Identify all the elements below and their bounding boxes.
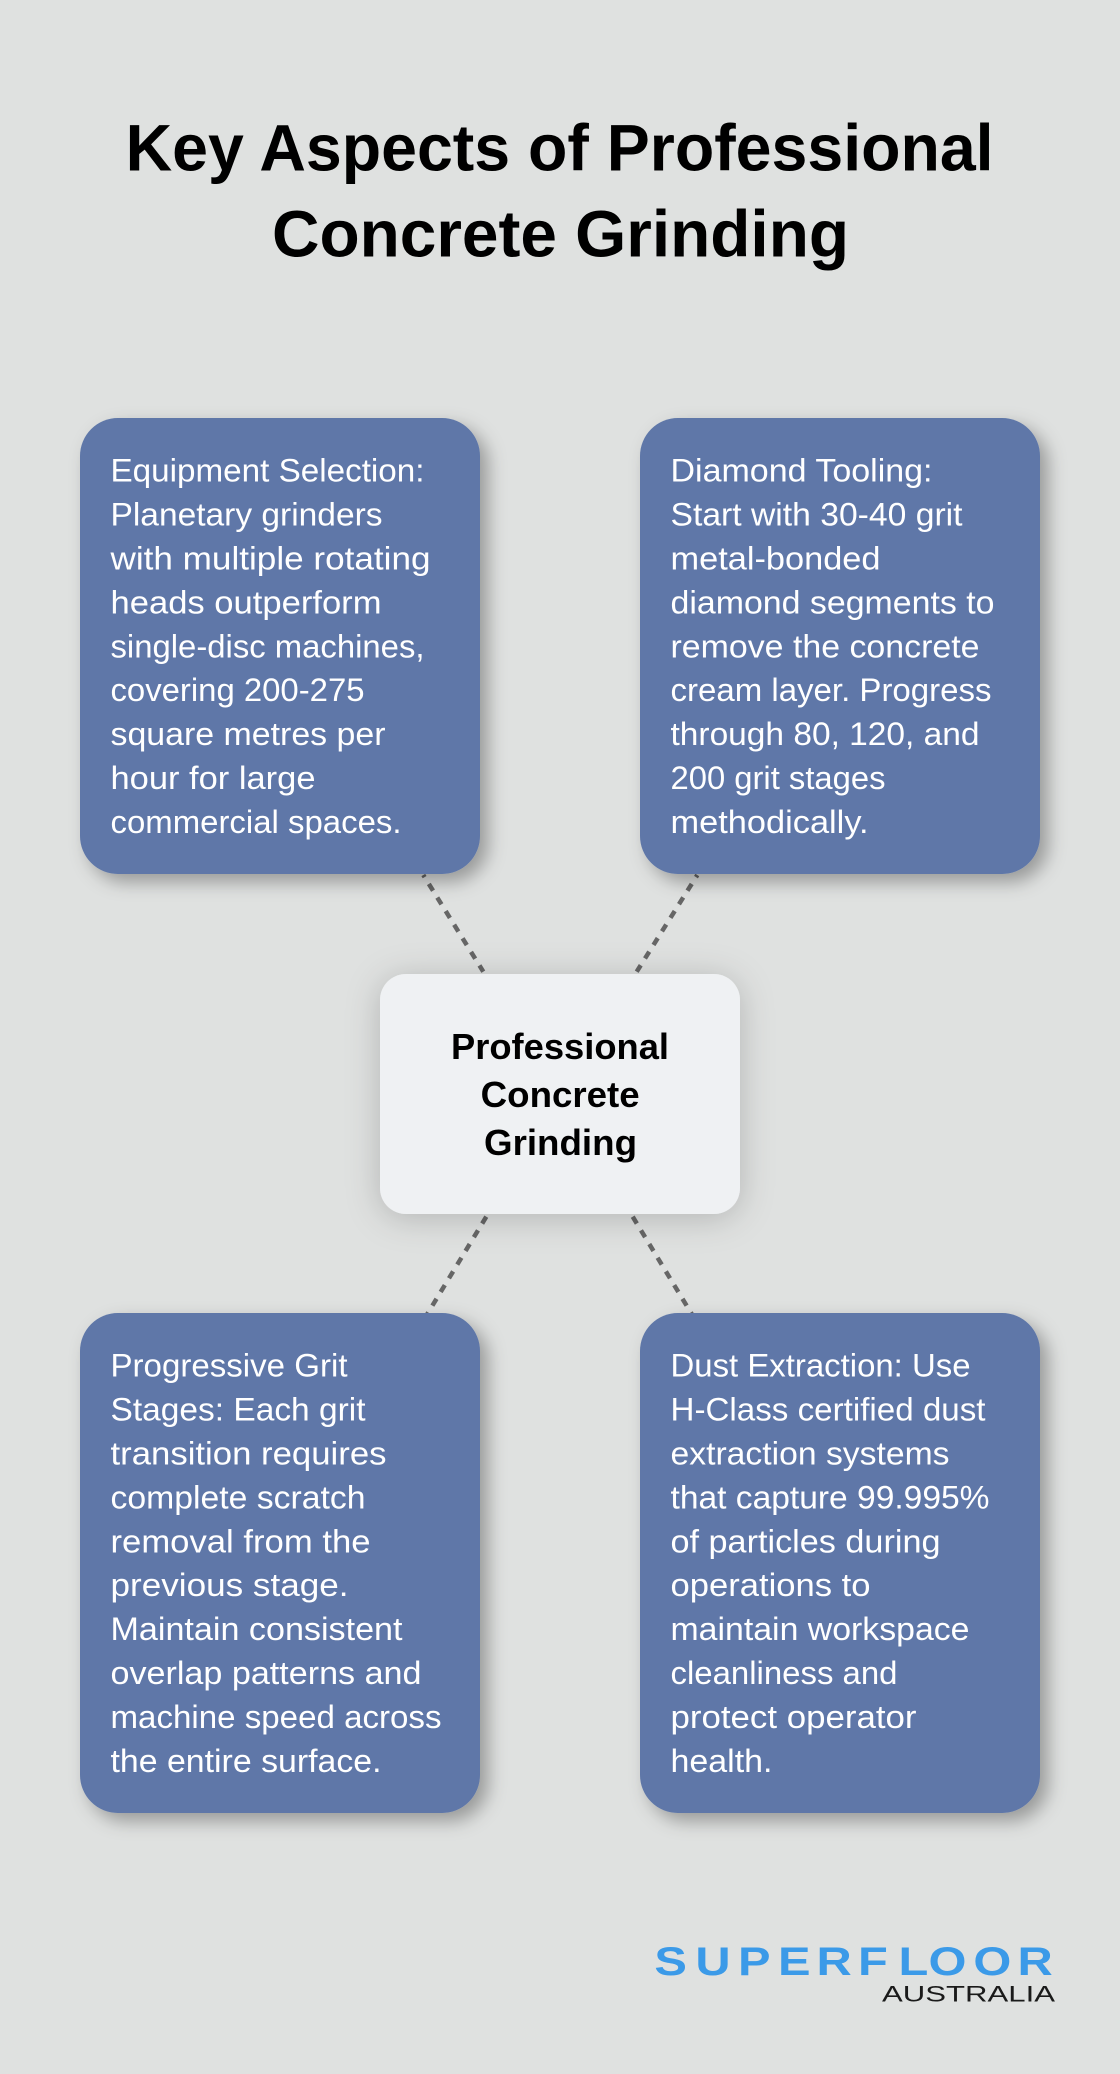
title bbox=[126, 110, 994, 270]
panel: equipment selection: hour for large bbox=[110, 760, 316, 796]
panel: diamond tooling: Start with 30-40 grit bbox=[670, 497, 963, 533]
title: Key Aspects of Professional bbox=[126, 110, 994, 184]
panel: equipment selection: single-disc machines, bbox=[110, 628, 424, 664]
panel: dust extraction: cleanliness and bbox=[670, 1655, 898, 1691]
panel: dust extraction: protect operator bbox=[670, 1699, 917, 1735]
panel: equipment selection: with multiple rotating bbox=[109, 540, 430, 576]
panel: equipment selection: heads outperform bbox=[110, 584, 382, 620]
panel: dust extraction: extraction systems bbox=[670, 1436, 950, 1472]
title: Concrete Grinding bbox=[272, 196, 849, 270]
panel: progressive grit stages: Stages: Each grit bbox=[110, 1392, 366, 1428]
panel: diamond tooling: methodically. bbox=[670, 804, 868, 840]
panel: diamond tooling: Diamond Tooling: bbox=[670, 453, 932, 489]
panel: diamond tooling: 200 grit stages bbox=[670, 760, 886, 796]
panel: equipment selection: commercial spaces. bbox=[110, 804, 402, 840]
panel: dust extraction bbox=[640, 1313, 1040, 1813]
logo: Superfloor Australia bbox=[654, 1940, 1056, 2007]
panel: dust extraction: health. bbox=[670, 1743, 772, 1779]
connector: diamond tooling to centre bbox=[637, 875, 697, 972]
panel: progressive grit stages: machine speed across bbox=[110, 1699, 441, 1735]
panel: diamond tooling: metal-bonded bbox=[670, 540, 880, 576]
panel: centre topic bbox=[380, 974, 740, 1214]
panel: progressive grit stages: overlap patterns and bbox=[110, 1655, 422, 1691]
panel: equipment selection: Equipment Selection: bbox=[110, 453, 424, 489]
logo: Superfloor Australia: SUPERFLOOR bbox=[654, 1940, 1053, 1984]
panel: equipment selection: square metres per bbox=[110, 716, 386, 752]
panel: diamond tooling: through 80, 120, and bbox=[670, 716, 980, 752]
panel: progressive grit stages bbox=[80, 1313, 480, 1813]
panel: equipment selection: Planetary grinders bbox=[110, 497, 382, 533]
panel: progressive grit stages: previous stage. bbox=[110, 1567, 348, 1603]
panel: diamond tooling bbox=[640, 418, 1040, 874]
panel: dust extraction: Dust Extraction: Use bbox=[670, 1348, 970, 1384]
panel: diamond tooling: remove the concrete bbox=[670, 628, 980, 664]
panel: progressive grit stages: transition requires bbox=[110, 1436, 386, 1472]
panel: progressive grit stages: Maintain consistent bbox=[110, 1611, 403, 1647]
connector: progressive grit stages to centre bbox=[427, 1217, 486, 1314]
logo: Superfloor Australia: AUSTRALIA bbox=[882, 1982, 1056, 2007]
panel: dust extraction: operations to bbox=[670, 1567, 870, 1603]
panel: progressive grit stages: Progressive Grit bbox=[110, 1348, 348, 1384]
connector: equipment selection to centre bbox=[423, 875, 483, 972]
panel: equipment selection: covering 200-275 bbox=[110, 672, 364, 708]
panel: dust extraction: of particles during bbox=[670, 1523, 940, 1559]
connector: dust extraction to centre bbox=[633, 1217, 692, 1314]
panel: diamond tooling: diamond segments to bbox=[670, 584, 994, 620]
panel: progressive grit stages: the entire surface. bbox=[110, 1743, 382, 1779]
panel: progressive grit stages: complete scratch bbox=[110, 1479, 366, 1515]
panel: diamond tooling: cream layer. Progress bbox=[670, 672, 992, 708]
panel: dust extraction: that capture 99.995% bbox=[670, 1479, 990, 1515]
panel: equipment selection bbox=[80, 418, 480, 874]
panel: centre topic: Grinding bbox=[484, 1122, 637, 1163]
panel: centre topic: Professional bbox=[451, 1026, 669, 1067]
panel: centre topic: Concrete bbox=[481, 1074, 640, 1115]
panel: progressive grit stages: removal from the bbox=[110, 1523, 370, 1559]
panel: dust extraction: maintain workspace bbox=[670, 1611, 970, 1647]
panel: dust extraction: H-Class certified dust bbox=[670, 1392, 986, 1428]
